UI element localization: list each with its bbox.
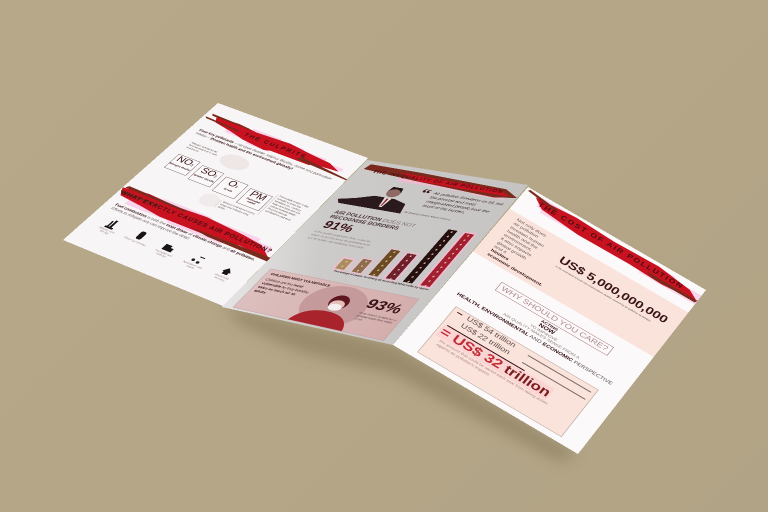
sentence: AIR QUALITY MAKES SENSE FROM A xyxy=(502,312,581,360)
pollutant box NO2: Nitrogen dioxide xyxy=(169,162,191,172)
pollutant box NO2: NO2 xyxy=(174,155,196,167)
pollutant box SO2: Sulphur dioxide xyxy=(193,174,215,183)
pollutant box PM: Particulate matter xyxy=(245,197,261,206)
icon: household: Household burning xyxy=(213,273,229,282)
pollutant box O3: O3 xyxy=(225,179,240,189)
icon: transport xyxy=(154,244,174,259)
brush heading: inequality: THE INEQUALITY OF AIR POLLUTION xyxy=(371,170,505,194)
heading: why should you care: WHY SHOULD YOU CARE? xyxy=(499,285,610,353)
icon: industry: Industry and energy xyxy=(98,226,115,235)
paragraph: environment, xyxy=(503,232,533,252)
note under boxes xyxy=(214,200,257,221)
bar labels: Percentage of people breathing air exceeding WHO limits by region xyxy=(333,270,429,291)
stat caption: of all children breathe air so polluted it puts their health at risk xyxy=(353,312,398,325)
panel: the inequality of air pollution (middle) xyxy=(222,160,528,345)
value line 1 xyxy=(528,355,591,392)
panel: the culprits (left) xyxy=(63,103,368,306)
icon: household xyxy=(213,268,230,282)
brush heading: what exactly causes air pollution: WHAT EXACTLY CAUSES AIR POLLUTION? xyxy=(119,190,274,254)
pollutant box NO2 xyxy=(164,154,201,176)
intro paragraph: Four key pollutants – nitrogen dioxide, sulphur dioxide, ozone and particulate matter – threaten health and the environment globally! xyxy=(195,128,333,181)
brush heading: the culprits: THE CULPRITS xyxy=(242,132,309,159)
paragraph xyxy=(486,217,548,287)
side notes: Particulate matter is tiny enough to enter the bloodstream, causing heart and lung disease and premature death. Sources include combustion and dust. xyxy=(264,195,309,222)
acting: ACTING xyxy=(540,319,559,332)
value line 2 xyxy=(522,362,586,400)
pollutant box PM: PM xyxy=(247,190,269,203)
icon: power generation xyxy=(123,232,147,247)
photo: speaker portrait xyxy=(338,187,406,214)
quote text: Air pollution threatens us all, but the poorest and most marginalized people bear the brunt of the burden. xyxy=(421,191,505,214)
photo: child wearing a mask xyxy=(288,286,368,331)
now: NOW xyxy=(537,322,556,336)
panel: children most vulnerable xyxy=(233,269,419,341)
heading: air pollution does not recognise borders: RECOGNISE BORDERS xyxy=(328,214,401,231)
icon: power generation: Power generation xyxy=(123,236,146,247)
paragraph: it also impacts xyxy=(499,236,533,258)
pollutant box PM xyxy=(236,188,273,211)
minus sign: – xyxy=(454,308,466,319)
bar 5: ♦♦♦♦♦♦♦♦♦♦♦♦ xyxy=(404,230,456,283)
icon: transport: Transport and vehicles xyxy=(154,249,173,259)
paragraph: health and the xyxy=(506,229,539,250)
icon: agriculture xyxy=(182,256,206,270)
quote xyxy=(403,186,505,221)
heading: children most vulnerable: CHILDREN MOST VULNERABLE xyxy=(269,272,332,288)
paragraph: air pollution xyxy=(512,221,540,239)
side notes xyxy=(257,194,313,229)
quote attribution: UN Secretary-General, António Guterres xyxy=(403,211,451,221)
faint smoke icon xyxy=(215,152,254,173)
sentence: TO IMPROVE xyxy=(529,323,558,342)
stat: five billion: US$ 5,000,000,000 xyxy=(556,254,671,326)
paragraph: hinders xyxy=(490,248,510,262)
paragraph: Not only does xyxy=(516,217,548,238)
icon: industry xyxy=(98,220,118,235)
icon: agriculture: Agriculture and waste xyxy=(182,260,203,270)
causes paragraph: Fuel combustion is both the main driver of climate change and air pollution. Efforts to mitigate one can improve the other! xyxy=(110,203,256,262)
line: health, environmental and economic perspective: HEALTH, ENVIRONMENTAL AND ECONOMIC PERSPECTIVE xyxy=(456,291,614,386)
brush heading: the culprits xyxy=(206,114,347,180)
stat: 91%: 91% xyxy=(320,218,358,234)
pollutant box SO2 xyxy=(188,165,224,187)
body text: of the world's population lives in places where air quality exceeds guideline limits set for health and wellbeing worldwide. xyxy=(307,230,372,250)
panel: cost summary xyxy=(473,209,688,357)
text: acting now xyxy=(502,312,581,360)
paragraph: economic development. xyxy=(486,252,544,287)
faint particle icon xyxy=(195,191,224,209)
stat: 93%: 93% xyxy=(362,297,407,317)
paragraph: threaten human xyxy=(509,225,545,248)
total: 32 trillion: = US$ 32 trillion xyxy=(437,325,554,400)
panel: net benefit xyxy=(417,306,599,437)
value: 54 trillion: US$ 54 trillion xyxy=(465,315,518,349)
bar chart xyxy=(332,230,478,291)
total caption: the amount that could be saved each year from taking action against air pollution's impacts xyxy=(435,340,548,406)
heading: air pollution does not recognise borders: AIR POLLUTION DOES NOT xyxy=(333,209,418,228)
paragraph: and it xyxy=(493,244,508,254)
brush heading: cost xyxy=(528,190,702,304)
panel: the cost of air pollution (right) xyxy=(393,187,706,454)
paragraph: Children are the most vulnerable as they breathe twice as much air as adults xyxy=(253,277,310,296)
value: 22 trillion: US$ 22 trillion xyxy=(459,322,512,356)
pollutant box O3 xyxy=(212,177,249,199)
brush heading: inequality xyxy=(364,164,517,200)
paragraph: global growth xyxy=(496,240,528,260)
quote mark: “ xyxy=(415,186,435,200)
icon row: sources of pollution xyxy=(98,220,230,282)
stat caption: is the estimated annual cost of premature deaths caused by air pollution worldwide xyxy=(555,265,651,322)
total rule xyxy=(447,325,525,371)
bar 1 xyxy=(335,259,353,270)
note above boxes: Nitrogen dioxide forms from burning fuel in cars and plants xyxy=(185,142,218,156)
pollutant box O3: Ozone xyxy=(223,188,233,193)
pollutant box SO2: SO2 xyxy=(198,166,219,179)
note under boxes: Ground-level ozone harms lungs and reduces crop yields xyxy=(217,201,255,216)
bar 1: ♦♦ xyxy=(337,259,351,269)
brush heading: cost: THE COST OF AIR POLLUTION xyxy=(537,201,685,290)
